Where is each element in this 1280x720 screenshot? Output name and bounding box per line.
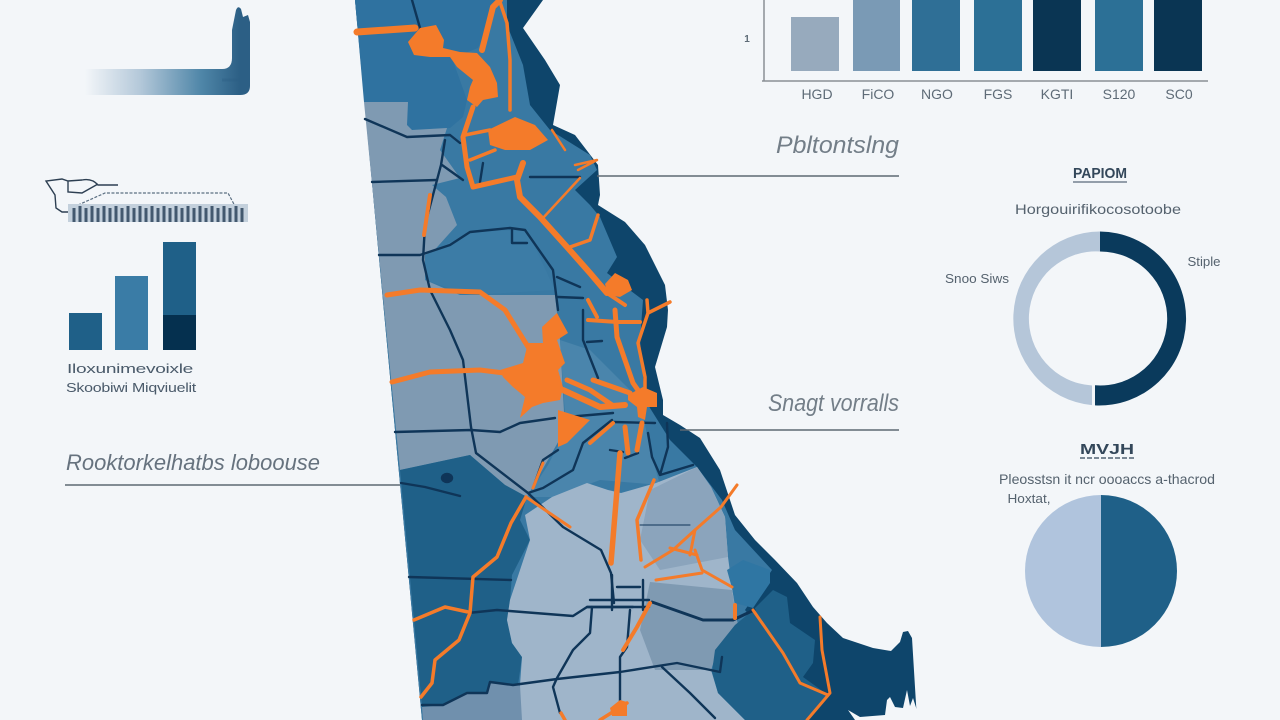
map: south-east dark blue county: [712, 590, 828, 720]
map: grey-blue north-west counties: [364, 102, 565, 497]
map: darker blue top-left county: [355, 0, 500, 130]
axis labels: SC0: [1165, 86, 1193, 102]
map: grey strip at south-west corner: [422, 682, 522, 720]
axis labels: KGTI: [1041, 86, 1073, 102]
map: blue central county: [425, 230, 555, 295]
callout: left label with leader line: Rooktorkelhatbs loboouse: [66, 450, 320, 475]
axis: [762, 0, 1208, 81]
map: mid-blue land: [355, 0, 800, 720]
callout: upper map label with leader line: Pbltontslng: [776, 132, 900, 159]
map: coastal region with road network: [355, 0, 920, 720]
donut chart panel: [945, 165, 1220, 405]
donut chart panel: Stiple: [1188, 254, 1220, 269]
icon: small outlined sketch with hatching: [46, 179, 248, 222]
map: orange city blobs: [408, 25, 657, 716]
icon: faded corner bracket: [85, 7, 250, 95]
callout: lower map label with leader line: Snagt vorralls: [768, 390, 899, 417]
subtitle: Horgouirifikocosotoobe: [1015, 201, 1181, 217]
map: dark-blue south-west county: [400, 455, 530, 707]
description: Pleosstsn it ncr oooaccs a-thacrod: [999, 471, 1215, 487]
heading: MVJH: [1080, 441, 1134, 458]
axis labels: [744, 34, 1193, 102]
pie right segment: [1101, 495, 1177, 647]
axis labels: S120: [1103, 86, 1136, 102]
text: left chart caption: Skoobiwi Miqviuelit: [66, 381, 197, 395]
donut light segment: [1013, 232, 1100, 405]
map: grey-blue south-east county: [640, 582, 738, 670]
map: white inlet: [848, 690, 920, 720]
bar chart: top right columns: [744, 0, 1208, 102]
donut dark segment: [1095, 232, 1186, 405]
bar chart: left mini chart: [69, 242, 196, 350]
heading: PAPIOM: [1073, 165, 1127, 182]
axis labels: FGS: [984, 86, 1012, 102]
axis labels: 1: [744, 34, 750, 45]
pie chart panel: Hoxtat,: [1008, 491, 1050, 506]
text: left chart caption: [66, 362, 197, 395]
map: grey-blue east counties: [640, 467, 728, 570]
pie chart panel: [999, 441, 1215, 647]
map: orange highways: [357, 0, 830, 720]
map: bright-blue patch on the east coast: [727, 560, 770, 608]
map: dark roads: [365, 0, 754, 718]
map: outer dark coast: [355, 0, 917, 720]
axis labels: HGD: [801, 86, 833, 102]
donut labels: Snoo Siws: [945, 271, 1010, 286]
pie left segment: [1025, 495, 1101, 647]
text: left chart caption: Iloxunimevoixle: [67, 362, 193, 376]
axis labels: FiCO: [862, 86, 894, 102]
map: blue central band over grey: [527, 340, 660, 497]
axis labels: NGO: [921, 86, 953, 102]
map: pale south-central counties: [507, 467, 745, 720]
